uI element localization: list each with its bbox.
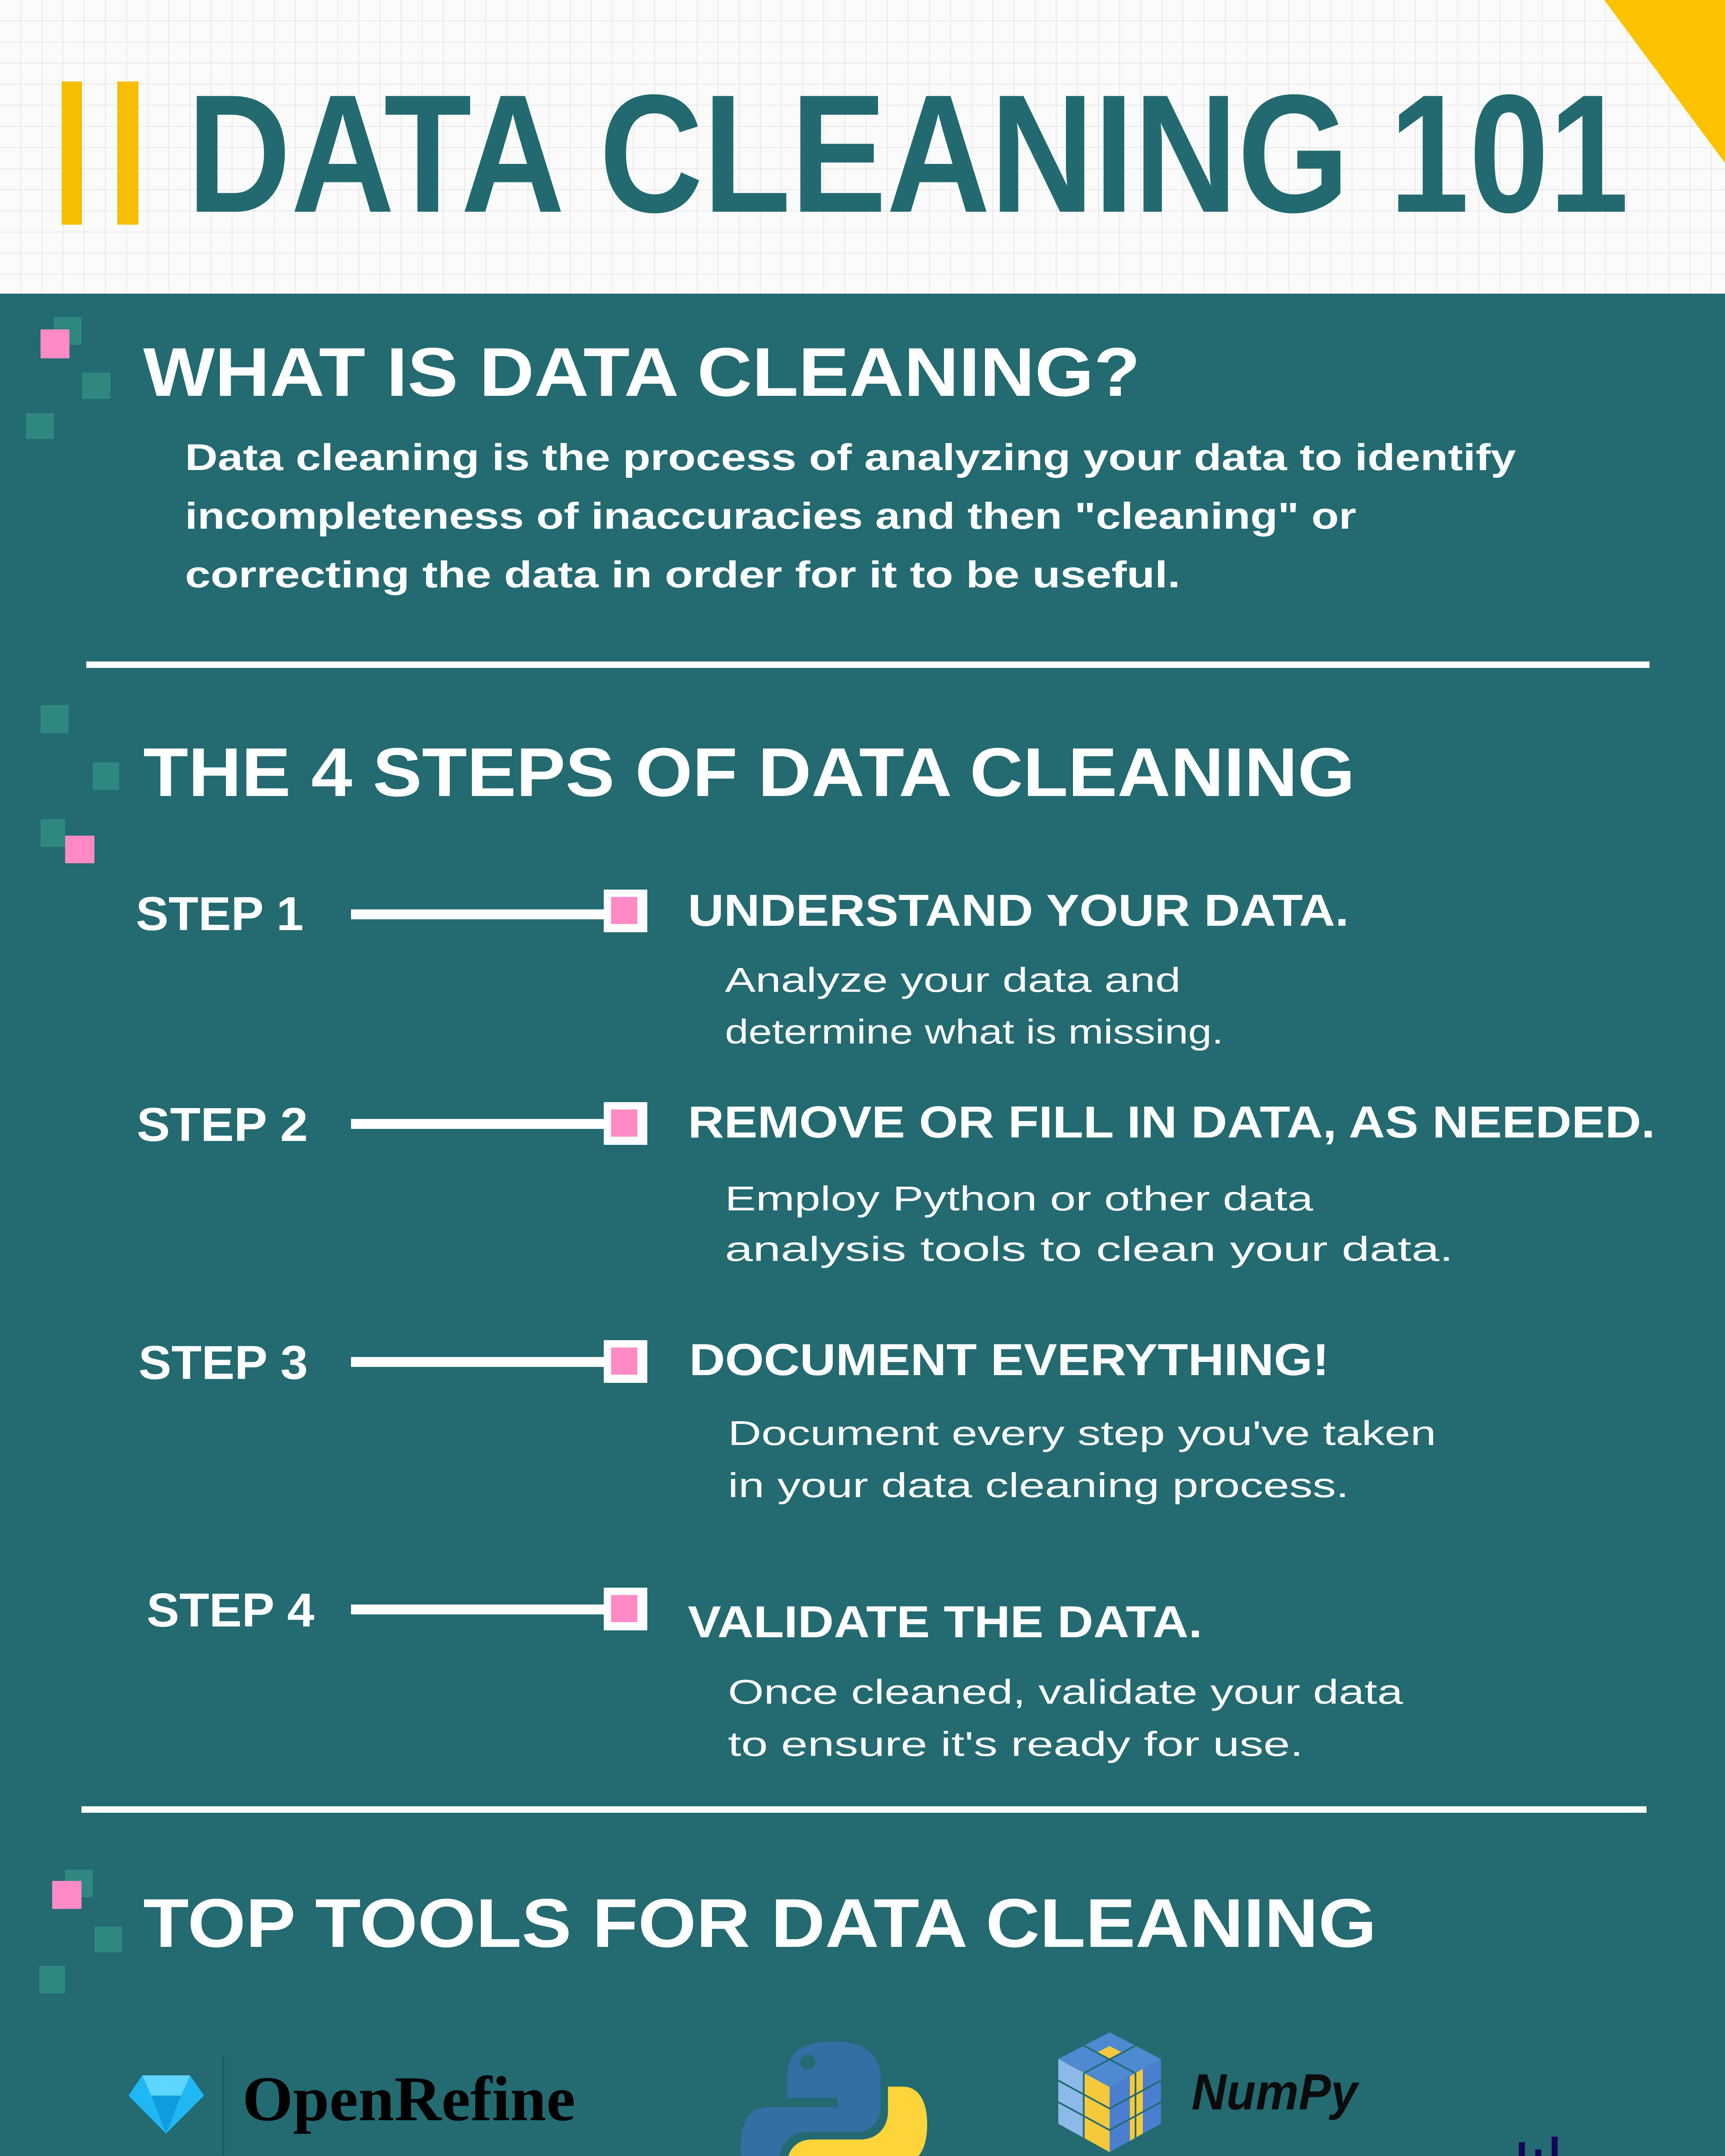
- step 1: [136, 886, 1349, 1051]
- step 4: [147, 1584, 1403, 1763]
- logo: OpenRefine: [129, 2056, 575, 2154]
- step 4: STEP 4: [147, 1584, 314, 1637]
- heading: top tools: TOP TOOLS FOR DATA CLEANING: [143, 1884, 1377, 1962]
- step 1: UNDERSTAND YOUR DATA.: [688, 886, 1349, 936]
- logo: OpenRefine: OpenRefine: [242, 2064, 575, 2134]
- step 3: [138, 1335, 1436, 1504]
- heading: what is data cleaning: WHAT IS DATA CLEANING?: [143, 333, 1140, 411]
- logo: Python: [740, 2041, 927, 2156]
- definition paragraph: correcting the data in order for it to be useful.: [185, 554, 1180, 595]
- step 3: DOCUMENT EVERYTHING!: [689, 1335, 1329, 1385]
- step 4: Once cleaned, validate your data: [728, 1673, 1403, 1711]
- decor squares: section 3: [39, 1870, 122, 1993]
- definition paragraph: Data cleaning is the process of analyzing your data to identify: [185, 437, 1516, 478]
- header background grid: [0, 0, 1725, 294]
- step 1: STEP 1: [136, 887, 304, 940]
- step 2: [137, 1097, 1655, 1268]
- logo: pandas: [1423, 2137, 1640, 2156]
- definition paragraph: [185, 437, 1516, 595]
- corner triangle: [1604, 0, 1725, 163]
- decor squares: section 1: [26, 317, 110, 439]
- heading: 4 steps: THE 4 STEPS OF DATA CLEANING: [143, 733, 1355, 811]
- step 1: Analyze your data and: [725, 961, 1181, 999]
- logo: NumPy: NumPy: [1192, 2064, 1360, 2121]
- step 2: analysis tools to clean your data.: [725, 1230, 1453, 1268]
- step 2: STEP 2: [137, 1098, 308, 1151]
- step 2: REMOVE OR FILL IN DATA, AS NEEDED.: [688, 1097, 1655, 1147]
- logo: NumPy: [1058, 2032, 1360, 2152]
- step 3: in your data cleaning process.: [728, 1466, 1349, 1504]
- step 4: VALIDATE THE DATA.: [688, 1597, 1202, 1647]
- step 1: determine what is missing.: [725, 1012, 1223, 1051]
- step 2: Employ Python or other data: [725, 1179, 1314, 1218]
- step 3: STEP 3: [138, 1336, 308, 1389]
- decor squares: section 2: [41, 705, 119, 863]
- step 4: to ensure it's ready for use.: [728, 1725, 1303, 1763]
- title bars icon: [62, 81, 138, 225]
- definition paragraph: incompleteness of inaccuracies and then "cleaning" or: [185, 495, 1356, 537]
- step 3: Document every step you've taken: [728, 1414, 1436, 1452]
